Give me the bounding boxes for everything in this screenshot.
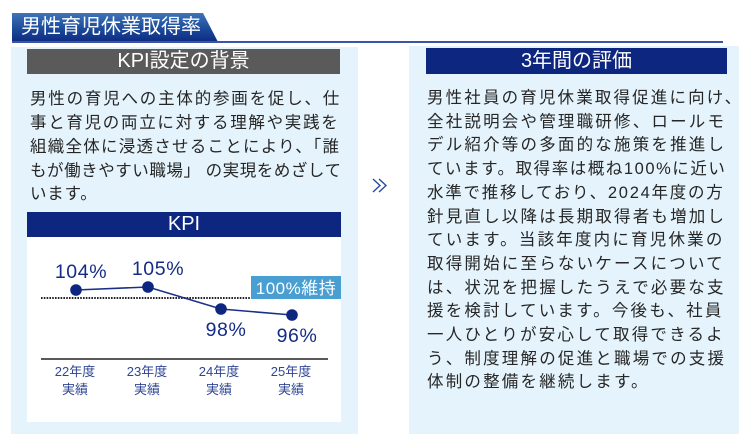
text block: evaluation description: 全社説明会や管理職研修、ロールモ	[427, 113, 726, 131]
line chart: KPI by year: 25年度	[271, 364, 311, 379]
panel: 3-year evaluation	[409, 46, 739, 434]
text block: evaluation description: ています。当該年度内に育児休業の	[427, 231, 725, 249]
heading: 3年間の評価: 3年間の評価	[521, 50, 632, 72]
heading: KPI	[27, 212, 341, 237]
heading: KPI設定の背景	[27, 49, 340, 74]
line chart: KPI by year: 実績	[206, 382, 232, 397]
line chart: KPI by year: 24年度	[199, 364, 239, 379]
line chart: KPI by year: 実績	[134, 382, 160, 397]
line chart: KPI by year: 98%	[206, 319, 246, 341]
text block: background description: 男性の育児への主体的参画を促し、仕	[30, 90, 341, 108]
text block: background description: います。	[30, 185, 98, 203]
text block: evaluation description	[427, 88, 743, 391]
text block: evaluation description: 針見直し以降は長期取得者も増加し	[427, 208, 726, 226]
text block: evaluation description: 一人ひとりが安心して取得できるよ	[427, 326, 725, 344]
text block: evaluation description: 男性社員の育児休業取得促進に向け、	[427, 89, 743, 107]
text block: evaluation description: 水準で推移しており、2024年度の方	[427, 184, 725, 202]
text block: evaluation description: は、状況を把握したうえで必要な支	[427, 279, 726, 297]
text block: evaluation description: う、制度理解の促進と職場での支援	[427, 350, 726, 368]
text block: evaluation description: 体制の整備を継続します。	[427, 373, 650, 391]
text block: background description: 事と育児の両立に対する理解や実践を	[30, 114, 339, 132]
line chart: KPI by year: 実績	[62, 382, 88, 397]
heading tab: 男性育児休業取得率	[12, 13, 723, 43]
line chart: KPI by year: 100%維持	[256, 279, 336, 298]
line chart: KPI by year: 22年度	[55, 364, 95, 379]
panel: KPI background and chart	[11, 47, 358, 434]
line chart: KPI by year: 104%	[55, 261, 107, 283]
text block: background description: もが働きやすい職場」 の実現をめざして	[30, 162, 342, 180]
text block: background description	[30, 90, 342, 203]
text block: evaluation description: 援を検討しています。今後も、社員	[427, 302, 724, 320]
line chart: KPI by year: 96%	[277, 325, 317, 347]
heading: KPI: KPI	[168, 213, 200, 235]
text block: evaluation description: デル紹介等の多面的な施策を推進し	[427, 136, 726, 154]
text block: evaluation description: ています。取得率は概ね100%に近い	[427, 160, 726, 178]
heading: 3年間の評価	[426, 48, 727, 74]
heading tab: 男性育児休業取得率: 男性育児休業取得率	[21, 16, 201, 38]
text block: background description: 組織全体に浸透させることにより、「誰	[30, 138, 340, 156]
line chart: KPI by year: 23年度	[127, 364, 167, 379]
heading: KPI設定の背景: KPI設定の背景	[117, 50, 250, 72]
panel: KPI chart	[27, 212, 341, 422]
text block: evaluation description: 取得開始に至らないケースについて	[427, 255, 725, 273]
line chart: KPI by year: 105%	[132, 258, 184, 280]
line chart: KPI by year: 実績	[278, 382, 304, 397]
